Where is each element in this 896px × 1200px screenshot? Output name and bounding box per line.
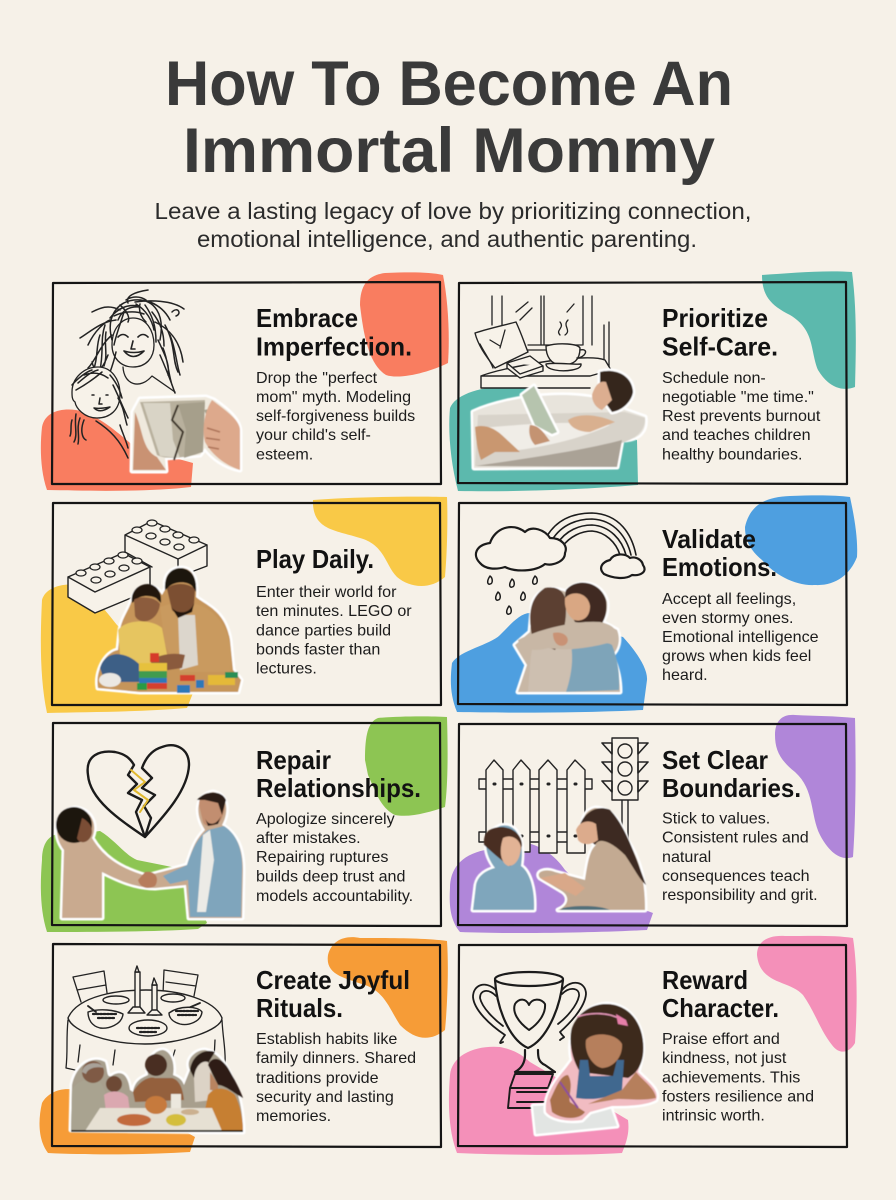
panel: create joyful rituals xyxy=(40,937,448,1154)
blob: purple top right xyxy=(775,715,856,858)
frame xyxy=(52,723,441,926)
body text: Accept all feelings, xyxy=(662,590,796,608)
body text: Praise effort and xyxy=(662,1030,780,1048)
body text: your child's self- xyxy=(256,426,371,444)
body text: consequences teach xyxy=(662,867,810,885)
title xyxy=(165,49,733,186)
blob: green top right xyxy=(365,716,448,816)
body text: lectures. xyxy=(256,660,317,678)
body text: healthy boundaries. xyxy=(662,446,802,464)
frame xyxy=(52,282,441,484)
subtitle: emotional intelligence, and authentic parenting. xyxy=(197,226,697,252)
subtitle: Leave a lasting legacy of love by prioritizing connection, xyxy=(154,198,752,224)
photo: broken mug held by hands xyxy=(132,397,240,471)
frame xyxy=(458,945,847,1147)
heading: Character. xyxy=(662,995,779,1023)
photo: girl drawing at desk xyxy=(533,1004,657,1134)
photo: family around dinner table xyxy=(71,1050,243,1132)
blob: orange top right xyxy=(328,937,448,1038)
body text: natural xyxy=(662,848,711,866)
blob: yellow top right xyxy=(313,497,447,586)
illustration: broken heart sketch xyxy=(88,745,189,837)
frame xyxy=(458,724,847,926)
blob: orange bottom left xyxy=(40,1089,195,1154)
body text: family dinners. Shared xyxy=(256,1049,416,1067)
body text: Apologize sincerely xyxy=(256,810,396,828)
panel: embrace imperfection xyxy=(41,272,449,491)
blob: coral bottom left xyxy=(41,410,193,491)
body text: esteem. xyxy=(256,446,313,464)
heading: Prioritize xyxy=(662,305,768,333)
body text: responsibility and grit. xyxy=(662,886,818,904)
panel: prioritize self-care xyxy=(449,271,856,491)
illustration: dinner table sketch xyxy=(66,966,225,1070)
blob: coral top right xyxy=(360,272,449,377)
blob: pink bottom left xyxy=(449,1047,628,1155)
frame xyxy=(52,503,441,705)
body text: even stormy ones. xyxy=(662,609,794,627)
illustration: fence and traffic light sketch xyxy=(479,738,648,853)
heading: Rituals. xyxy=(256,995,343,1023)
title: How To Become An xyxy=(165,49,733,119)
photo: woman reading in bath xyxy=(473,371,645,468)
panel: play daily xyxy=(41,497,447,713)
body text: bonds faster than xyxy=(256,640,380,658)
body text: self-forgiveness builds xyxy=(256,407,415,425)
heading: Boundaries. xyxy=(662,775,801,803)
subtitle xyxy=(154,198,752,252)
body text: and teaches children xyxy=(662,426,811,444)
panel: set clear boundaries xyxy=(450,715,856,933)
heading: Reward xyxy=(662,967,748,995)
body text: ten minutes. LEGO or xyxy=(256,602,412,620)
body text: kindness, not just xyxy=(662,1049,787,1067)
body text: Enter their world for xyxy=(256,583,397,601)
panel: repair relationships xyxy=(41,716,448,932)
body text: negotiable "me time." xyxy=(662,388,814,406)
blob: teal top right xyxy=(762,271,856,389)
heading: Self-Care. xyxy=(662,334,778,362)
body text: Schedule non- xyxy=(662,369,766,387)
panel: reward character xyxy=(449,936,857,1155)
frame xyxy=(458,503,847,705)
body text: Emotional intelligence xyxy=(662,628,819,646)
body text: security and lasting xyxy=(256,1088,394,1106)
heading: Relationships. xyxy=(256,775,421,803)
illustration: trophy sketch xyxy=(473,972,586,1108)
title: Immortal Mommy xyxy=(183,116,715,186)
blob: green bottom left xyxy=(41,831,207,932)
body text: Repairing ruptures xyxy=(256,848,388,866)
body text: Drop the "perfect xyxy=(256,369,378,387)
body text: models accountability. xyxy=(256,887,413,905)
body text: Consistent rules and xyxy=(662,828,809,846)
heading: Imperfection. xyxy=(256,334,412,362)
photo: couple shaking hands xyxy=(56,792,243,918)
body text: Rest prevents burnout xyxy=(662,407,821,425)
heading: Create Joyful xyxy=(256,967,410,995)
body text: grows when kids feel xyxy=(662,647,811,665)
body text: mom" myth. Modeling xyxy=(256,388,411,406)
illustration: laughing mother and child sketch xyxy=(70,290,184,458)
illustration: window seat sketch xyxy=(475,296,611,388)
frame xyxy=(52,944,441,1147)
body text: Establish habits like xyxy=(256,1030,397,1048)
blob: pink top right xyxy=(757,936,857,1052)
body text: intrinsic worth. xyxy=(662,1106,765,1124)
body text: dance parties build xyxy=(256,622,391,640)
photo: father and child playing with blocks xyxy=(97,568,241,693)
blob: purple bottom left xyxy=(450,842,653,933)
body text: heard. xyxy=(662,666,708,684)
body text: memories. xyxy=(256,1107,331,1125)
illustration: rain cloud and rainbow sketch xyxy=(476,513,645,614)
blob: yellow bottom left xyxy=(41,585,193,713)
blob: blue bottom left xyxy=(451,613,647,713)
heading: Emotions. xyxy=(662,554,777,582)
body text: after mistakes. xyxy=(256,829,361,847)
illustration: LEGO bricks sketch xyxy=(68,520,207,613)
blob: blue top right xyxy=(745,495,857,585)
heading: Embrace xyxy=(256,305,358,333)
photo: mother and child hugging xyxy=(515,583,620,692)
panel: validate emotions xyxy=(451,495,857,713)
heading: Set Clear xyxy=(662,747,768,775)
heading: Repair xyxy=(256,747,331,775)
photo: mother talking to son xyxy=(473,808,646,910)
blob: teal bottom left xyxy=(449,386,638,491)
heading: Play Daily. xyxy=(256,546,374,574)
body text: Stick to values. xyxy=(662,810,770,828)
heading: Validate xyxy=(662,526,756,554)
body text: achievements. This xyxy=(662,1068,800,1086)
frame xyxy=(458,282,847,484)
body text: traditions provide xyxy=(256,1069,379,1087)
body text: builds deep trust and xyxy=(256,868,405,886)
body text: fosters resilience and xyxy=(662,1088,814,1106)
